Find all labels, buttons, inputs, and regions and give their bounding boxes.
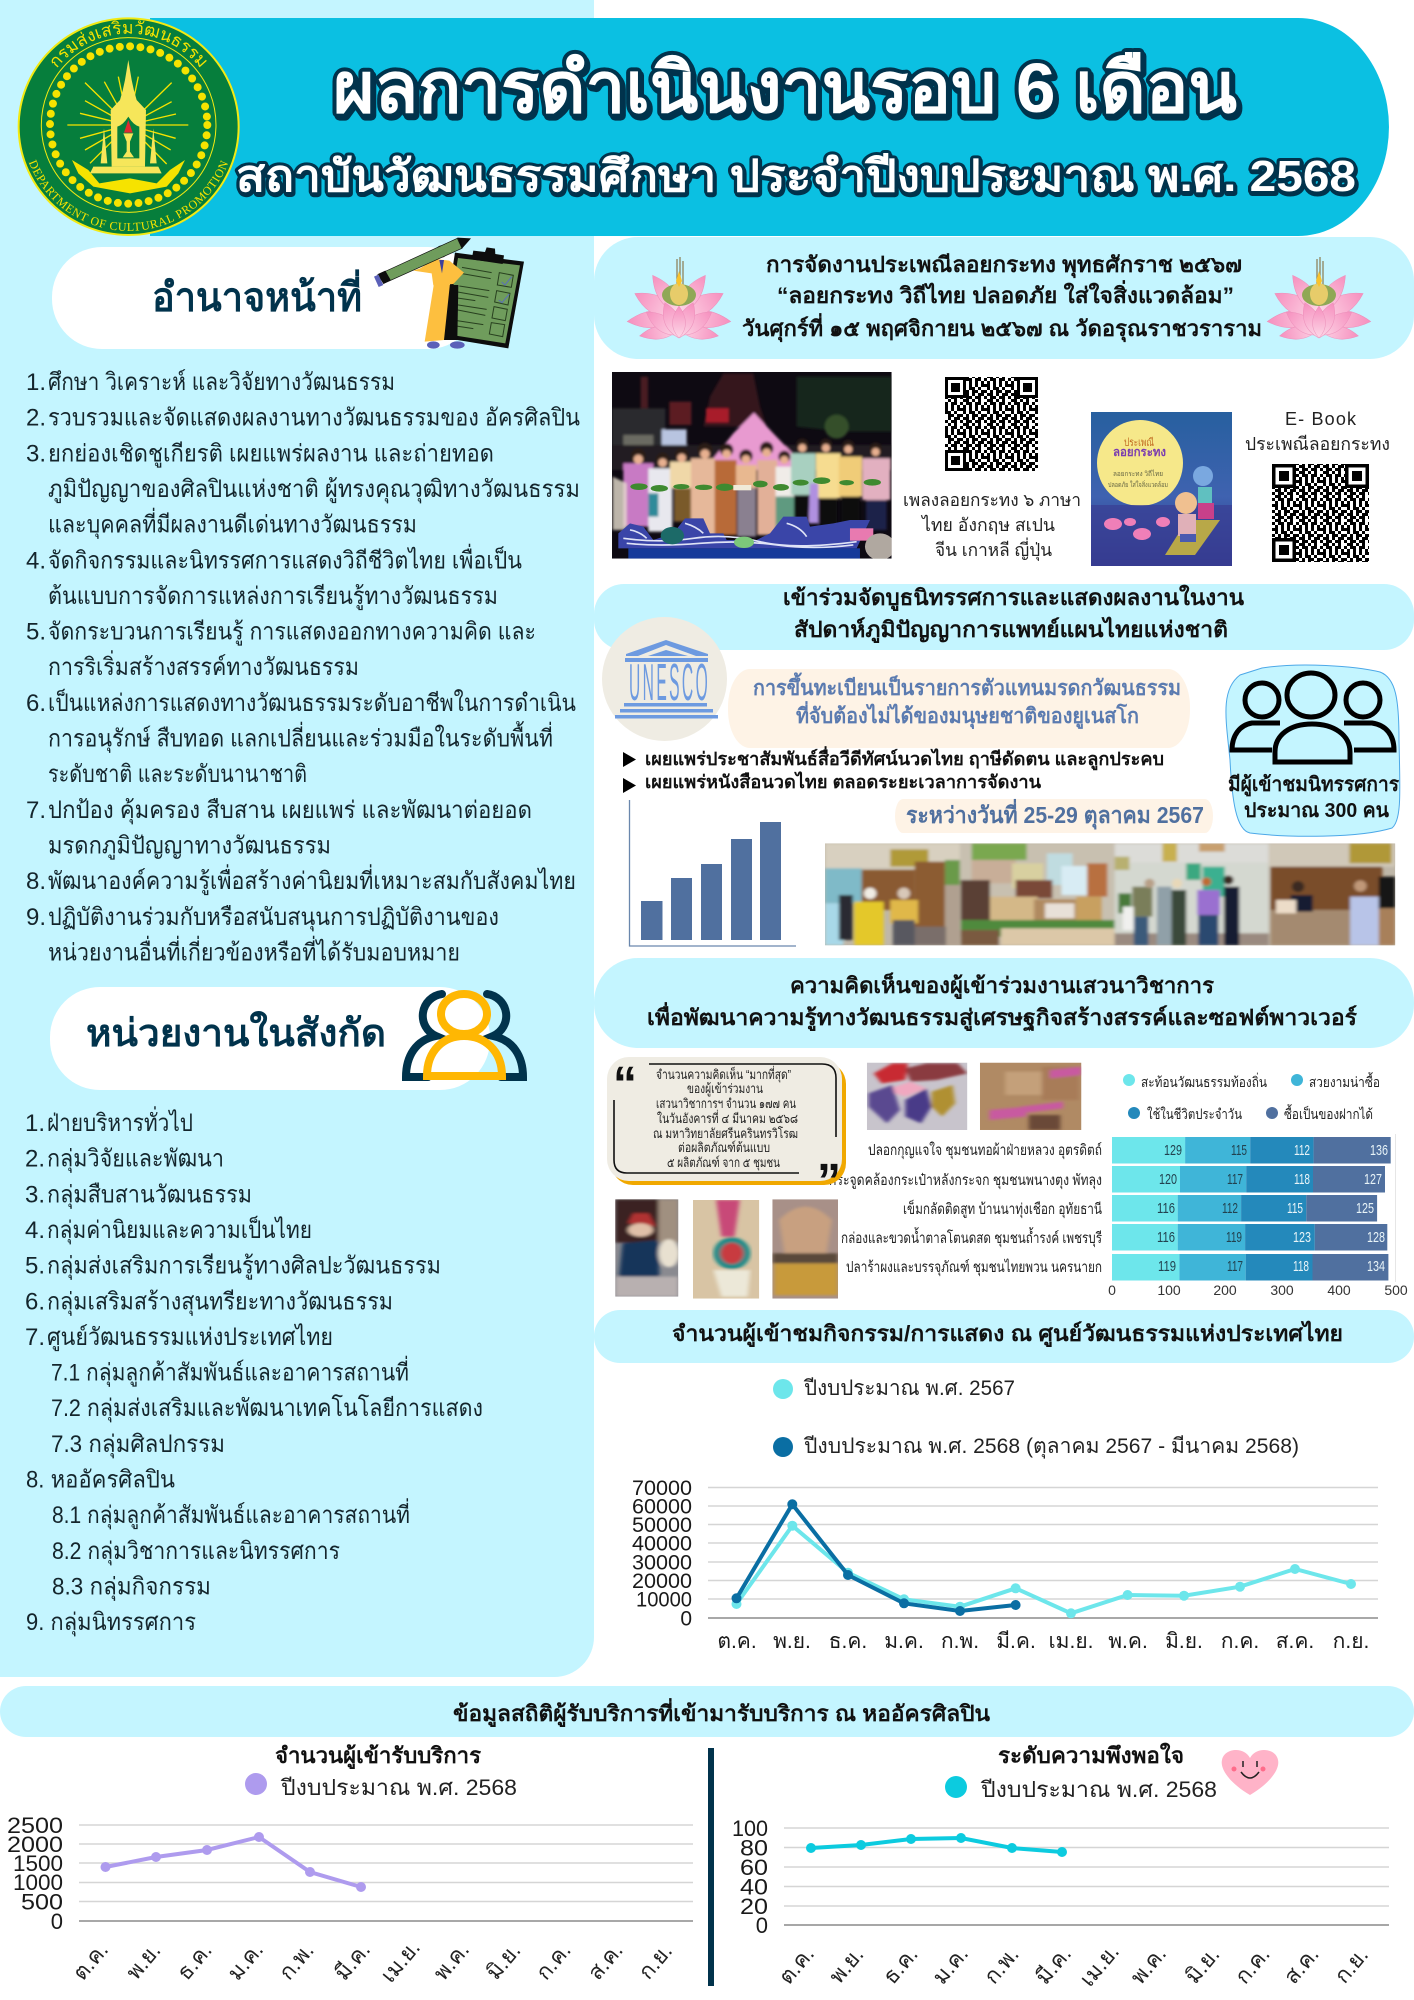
list: duties: การริเริ่มสร้างสรรค์ทางวัฒนธรรม	[48, 650, 359, 681]
stacked bar chart: product ratings: 100	[1157, 1282, 1181, 1298]
stacked bar chart: product ratings: 117	[1227, 1258, 1243, 1275]
bullet list: exhibition activities: เผยแพร่หนังสือนวดไทย ตลอดระยะเวลาการจัดงาน	[645, 771, 1042, 792]
panel: exhibition heading: เข้าร่วมจัดบูธนิทรรศการและแสดงผลงานในงาน	[783, 584, 1244, 612]
stacked bar chart: product ratings: 400	[1327, 1282, 1351, 1298]
line chart: satisfaction: มิ.ย.	[1180, 1942, 1225, 1988]
heading: service users	[245, 1743, 517, 1800]
department logo	[18, 17, 240, 236]
line chart: cultural centre visitors: มิ.ย.	[1165, 1630, 1203, 1653]
line chart: satisfaction: ม.ค.	[927, 1941, 973, 1989]
panel: statistics heading	[0, 1686, 1414, 1737]
list: departments	[25, 1106, 483, 1637]
list: departments: 9. กลุ่มนิทรรศการ	[26, 1609, 196, 1637]
panel: Loy Krathong heading: การจัดงานประเพณีลอยกระทง พุทธศักราช ๒๕๖๗	[766, 252, 1242, 279]
legend: visitors chart	[773, 1377, 1299, 1459]
heading: satisfaction level	[945, 1742, 1217, 1802]
icon: smiling heart	[1222, 1750, 1278, 1795]
date callout	[895, 798, 1213, 833]
list: duties: 4.	[26, 547, 46, 574]
callout: UNESCO registration: ที่จับต้องไม่ได้ของมนุษยชาติของยูเนสโก	[796, 700, 1139, 730]
list: departments: 8.2 กลุ่มวิชาการและนิทรรศการ	[52, 1538, 340, 1566]
e-book label	[1245, 409, 1390, 454]
stacked bar chart: product ratings: 112	[1294, 1142, 1310, 1159]
heading: service users: จำนวนผู้เข้ารับบริการ	[275, 1743, 481, 1770]
line chart: cultural centre visitors: เม.ย.	[1048, 1630, 1094, 1653]
list: departments: 7.2 กลุ่มส่งเสริมและพัฒนาเทคโนโลยีการแสดง	[51, 1394, 483, 1423]
line chart: cultural centre visitors: 70000	[632, 1477, 692, 1500]
line chart: service users: ก.ย.	[633, 1938, 677, 1984]
list: duties: มรดกภูมิปัญญาทางวัฒนธรรม	[48, 832, 331, 860]
line chart: satisfaction: ธ.ค.	[878, 1942, 923, 1989]
list: duties: ปฏิบัติงานร่วมกับหรือสนับสนุนการปฏิบัติงานของ	[48, 904, 499, 932]
e-book cover: ประเพณี	[1124, 436, 1154, 449]
line chart: cultural centre visitors: 0	[680, 1608, 692, 1630]
line chart: cultural centre visitors: พ.ย.	[773, 1630, 811, 1653]
subtitle: สถาบันวัฒนธรรมศึกษา ประจำปีงบประมาณ พ.ศ. 2568	[236, 152, 1356, 201]
caption: song in six languages: จีน เกาหลี ญี่ปุ่น	[935, 537, 1052, 561]
quote card: ๕ ผลิตภัณฑ์ จาก ๕ ชุมชน	[667, 1155, 780, 1171]
heading: satisfaction level: ระดับความพึงพอใจ	[998, 1742, 1184, 1768]
line chart: service users: ม.ค.	[222, 1937, 268, 1985]
legend: stacked bar chart	[1123, 1072, 1380, 1122]
line chart: cultural centre visitors	[632, 1477, 1378, 1653]
line chart: service users: พ.ค.	[428, 1937, 474, 1985]
QR code: e-book	[1272, 464, 1369, 562]
icon: rising bar chart	[630, 800, 796, 946]
line chart: satisfaction: เม.ย.	[1075, 1939, 1124, 1991]
stacked bar chart: product ratings: กระจูดคล้องกระเป๋าหลังกระจก ชุมชนพนางตุง พัทลุง	[829, 1172, 1102, 1190]
line chart: service users: พ.ย.	[121, 1938, 166, 1984]
line chart: satisfaction: 0	[756, 1913, 768, 1938]
stacked bar chart: product ratings: 115	[1231, 1142, 1247, 1159]
line chart: cultural centre visitors: ม.ค.	[884, 1630, 924, 1653]
list: departments: ฝ่ายบริหารทั่วไป	[47, 1106, 193, 1137]
caption: song in six languages: ไทย อังกฤษ สเปน	[920, 514, 1055, 535]
line chart: cultural centre visitors: ก.ย.	[1333, 1630, 1369, 1653]
list: duties: ระดับชาติ และระดับนานาชาติ	[48, 761, 307, 788]
panel: Loy Krathong heading: “ลอยกระทง วิถีไทย ปลอดภัย ใส่ใจสิ่งแวดล้อม”	[777, 279, 1234, 308]
line chart: satisfaction: มี.ค.	[1030, 1941, 1076, 1989]
stacked bar chart: product ratings: ปลอกกุญแจใจ ชุมชนทอผ้าฝ่ายหลวง อุตรดิตถ์	[868, 1141, 1102, 1160]
panel: cultural centre heading	[594, 1310, 1414, 1363]
line chart: satisfaction	[732, 1816, 1389, 1991]
list: departments: 8.1 กลุ่มลูกค้าสัมพันธ์และอาคารสถานที่	[52, 1498, 410, 1530]
stacked bar chart: product ratings: 134	[1367, 1258, 1385, 1275]
list: duties: 6.	[26, 690, 46, 717]
panel: seminar heading	[594, 958, 1414, 1048]
line chart: satisfaction: 20	[740, 1894, 768, 1919]
panel: Loy Krathong heading: วันศุกร์ที่ ๑๕ พฤศจิกายน ๒๕๖๗ ณ วัดอรุณราชวราราม	[742, 312, 1262, 343]
legend: stacked bar chart: สะท้อนวัฒนธรรมท้องถิ่น	[1141, 1073, 1267, 1090]
quote card: ”	[817, 1155, 841, 1208]
photo strip: exhibition booths	[825, 843, 1395, 945]
stacked bar chart: product ratings: 123	[1293, 1229, 1311, 1246]
stacked bar chart: product ratings: 136	[1370, 1142, 1388, 1159]
callout: UNESCO registration	[728, 669, 1190, 748]
icon: UNESCO emblem	[602, 617, 727, 741]
stacked bar chart: product ratings: 116	[1157, 1200, 1175, 1217]
stacked bar chart: product ratings: 120	[1159, 1171, 1177, 1188]
line chart: cultural centre visitors: ส.ค.	[1276, 1630, 1314, 1653]
stacked bar chart: product ratings: 0	[1108, 1282, 1116, 1298]
line chart: cultural centre visitors: 50000	[632, 1514, 692, 1537]
panel: seminar heading: เพื่อพัฒนาความรู้ทางวัฒนธรรมสู่เศรษฐกิจสร้างสรรค์และซอฟต์พาวเวอร์	[647, 1001, 1357, 1032]
list: departments: 8.3 กลุ่มกิจกรรม	[52, 1574, 211, 1602]
list: duties: 5.	[26, 619, 46, 646]
list: duties: รวบรวมและจัดแสดงผลงานทางวัฒนธรรมของ อัครศิลปิน	[48, 405, 580, 432]
heading pill: departments: หน่วยงานในสังกัด	[86, 1011, 386, 1055]
e-book cover: ลอยกระทง วิถีไทย	[1113, 469, 1163, 478]
heading pill: duties	[52, 247, 478, 349]
callout: UNESCO registration: การขึ้นทะเบียนเป็นรายการตัวแทนมรดกวัฒนธรรม	[753, 672, 1181, 700]
list: duties: ศึกษา วิเคราะห์ และวิจัยทางวัฒนธรรม	[48, 368, 395, 396]
icon: UNESCO emblem: UNESCO	[629, 654, 710, 712]
heading: satisfaction level: ปีงบประมาณ พ.ศ. 2568	[980, 1777, 1217, 1802]
stacked bar chart: product ratings	[829, 1134, 1408, 1298]
list: departments: 4.	[25, 1217, 45, 1244]
caption: song in six languages: เพลงลอยกระทง ๖ ภาษา	[903, 490, 1081, 510]
e-book cover	[1091, 412, 1232, 566]
list: duties	[26, 368, 580, 966]
line chart: service users: 1000	[13, 1870, 63, 1895]
stacked bar chart: product ratings: 115	[1287, 1200, 1303, 1217]
line chart: satisfaction: 60	[740, 1855, 768, 1880]
list: duties: ต้นแบบการจัดการแหล่งการเรียนรู้ทางวัฒนธรรม	[48, 583, 498, 611]
line chart: cultural centre visitors: พ.ค.	[1108, 1630, 1148, 1653]
list: duties: 7.	[26, 797, 46, 824]
list: duties: 1.	[26, 369, 46, 396]
line chart: cultural centre visitors: 60000	[632, 1496, 692, 1518]
list: duties: 3.	[26, 440, 46, 467]
QR code: song	[945, 377, 1038, 471]
line chart: satisfaction: พ.ย.	[824, 1942, 869, 1988]
line chart: satisfaction: ก.พ.	[979, 1942, 1024, 1989]
quote card	[607, 1057, 846, 1208]
legend: stacked bar chart: สวยงามน่าซื้อ	[1309, 1072, 1380, 1090]
stacked bar chart: product ratings: 127	[1364, 1171, 1382, 1188]
list: departments: 2.	[25, 1146, 45, 1173]
line chart: cultural centre visitors: 40000	[632, 1532, 692, 1556]
line chart: service users: 0	[51, 1909, 63, 1934]
list: departments: 5.	[25, 1253, 45, 1280]
quote card: ในวันอังคารที่ ๔ มีนาคม ๒๕๖๘	[657, 1110, 798, 1126]
list: departments: กลุ่มวิจัยและพัฒนา	[47, 1146, 224, 1174]
list: duties: จัดกระบวนการเรียนรู้ การแสดงออกทางความคิด และ	[48, 619, 536, 647]
heading pill: duties: อำนาจหน้าที่	[152, 269, 362, 320]
stacked bar chart: product ratings: ปลาร้าผงและบรรจุภัณฑ์ ชุมชนไทยพวน นครนายก	[846, 1258, 1102, 1277]
header banner	[150, 18, 1389, 236]
list: departments: 8. หออัครศิลปิน	[26, 1466, 175, 1494]
legend: stacked bar chart: ใช้ในชีวิตประจำวัน	[1147, 1106, 1242, 1122]
line chart: cultural centre visitors: มี.ค.	[996, 1630, 1036, 1653]
quote card: ของผู้เข้าร่วมงาน	[687, 1081, 763, 1097]
stacked bar chart: product ratings: 125	[1356, 1200, 1374, 1217]
list: departments: 7.	[25, 1324, 45, 1351]
stacked bar chart: product ratings: 128	[1367, 1229, 1385, 1246]
line chart: service users: ธ.ค.	[172, 1938, 217, 1985]
list: duties: พัฒนาองค์ความรู้เพื่อสร้างค่านิยมที่เหมาะสมกับสังคมไทย	[48, 864, 576, 896]
line chart: satisfaction: 100	[732, 1816, 768, 1841]
panel: visitors count	[1226, 665, 1400, 836]
line chart: service users: ส.ค.	[583, 1938, 628, 1985]
line chart: cultural centre visitors: ต.ค.	[717, 1630, 757, 1653]
line chart: cultural centre visitors: 10000	[636, 1588, 692, 1612]
line chart: service users: ต.ค.	[67, 1937, 113, 1985]
list: departments: กลุ่มค่านิยมและความเป็นไทย	[47, 1215, 312, 1245]
panel: seminar heading: ความคิดเห็นของผู้เข้าร่วมงานเสวนาวิชาการ	[790, 971, 1214, 1000]
legend: visitors chart: ปีงบประมาณ พ.ศ. 2568 (ตุลาคม 2567 - มีนาคม 2568)	[803, 1435, 1299, 1459]
list: departments: ศูนย์วัฒนธรรมแห่งประเทศไทย	[47, 1323, 333, 1352]
stacked bar chart: product ratings: 118	[1294, 1171, 1310, 1188]
list: departments: กลุ่มสืบสานวัฒนธรรม	[47, 1181, 252, 1209]
legend: stacked bar chart: ซื้อเป็นของฝากได้	[1284, 1104, 1373, 1122]
panel: visitors count: มีผู้เข้าชมนิทรรศการ	[1228, 773, 1399, 798]
e-book cover: ลอยกระทง	[1113, 445, 1166, 459]
icon: right lotus krathong	[1266, 257, 1372, 342]
line chart: satisfaction: 80	[740, 1836, 768, 1860]
list: duties: ยกย่องเชิดชูเกียรติ เผยแพร่ผลงาน และถ่ายทอด	[48, 440, 494, 468]
line chart: cultural centre visitors: ธ.ค.	[829, 1630, 867, 1653]
stacked bar chart: product ratings: 300	[1270, 1282, 1294, 1298]
line chart: service users: มี.ค.	[329, 1937, 375, 1985]
stacked bar chart: product ratings: 118	[1293, 1258, 1309, 1275]
stacked bar chart: product ratings: 129	[1164, 1142, 1182, 1159]
icon: people group	[1232, 673, 1394, 762]
line chart: satisfaction: ก.ย.	[1329, 1942, 1373, 1988]
stacked bar chart: product ratings: 117	[1227, 1171, 1243, 1188]
stacked bar chart: product ratings: 116	[1157, 1229, 1175, 1246]
quote card: ณ มหาวิทยาลัยศรีนครินทรวิโรฒ	[653, 1126, 798, 1141]
line chart: service users: ก.พ.	[274, 1938, 319, 1985]
panel: Loy Krathong heading	[594, 237, 1414, 359]
list: departments: 3.	[25, 1181, 45, 1208]
stacked bar chart: product ratings: 112	[1222, 1200, 1238, 1217]
list: duties: เป็นแหล่งการแสดงทางวัฒนธรรมระดับอาชีพในการดำเนิน	[48, 688, 576, 717]
photo: Loy Krathong group	[612, 372, 895, 560]
quote card: ต่อผลิตภัณฑ์ต้นแบบ	[678, 1140, 770, 1155]
bullet list: exhibition activities: เผยแพร่ประชาสัมพันธ์สื่อวีดีทัศน์นวดไทย ฤาษีดัดตน และลูกประคบ	[645, 746, 1164, 771]
heading: service users: ปีงบประมาณ พ.ศ. 2568	[280, 1775, 517, 1800]
stacked bar chart: product ratings: เข็มกลัดติดสูท บ้านนาทุ่งเชือก อุทัยธานี	[903, 1199, 1102, 1219]
stacked bar chart: product ratings: กล่องและขวดน้ำตาลโตนดสด ชุมชนถ้ำรงค์ เพชรบุรี	[841, 1227, 1102, 1248]
department logo: กรมส่งเสริมวัฒนธรรม	[52, 20, 207, 68]
list: duties: ปกป้อง คุ้มครอง สืบสาน เผยแพร่ และพัฒนาต่อยอด	[48, 797, 532, 825]
list: departments: 7.1 กลุ่มลูกค้าสัมพันธ์และอาคารสถานที่	[51, 1356, 409, 1388]
e-book cover: ปลอดภัย ใส่ใจสิ่งแวดล้อม	[1108, 480, 1168, 489]
line chart: service users: 1500	[13, 1851, 63, 1876]
panel: exhibition heading	[594, 584, 1414, 650]
left column background panel	[0, 0, 594, 1677]
stacked bar chart: product ratings: 119	[1226, 1229, 1242, 1246]
icon: person with giant pencil and clipboard	[374, 238, 524, 349]
line chart: service users: ก.ค.	[531, 1938, 576, 1985]
caption: song in six languages	[903, 490, 1081, 561]
icon: three people	[406, 994, 523, 1077]
e-book label: ประเพณีลอยกระทง	[1245, 434, 1390, 454]
vertical divider	[708, 1748, 714, 1986]
stacked bar chart: product ratings: 500	[1384, 1282, 1408, 1298]
line chart: satisfaction: ส.ค.	[1279, 1942, 1324, 1989]
list: duties: การอนุรักษ์ สืบทอด แลกเปลี่ยนและร่วมมือในระดับพื้นที่	[48, 720, 553, 754]
photos: community products	[615, 1063, 1081, 1299]
line chart: service users: 2500	[7, 1813, 63, 1838]
list: departments: กลุ่มส่งเสริมการเรียนรู้ทางศิลปะวัฒนธรรม	[47, 1253, 441, 1281]
panel: statistics heading: ข้อมูลสถิติผู้รับบริการที่เข้ามารับบริการ ณ หออัครศิลปิน	[453, 1697, 990, 1728]
panel: visitors count: ประมาณ 300 คน	[1244, 800, 1389, 822]
list: duties: จัดกิจกรรมและนิทรรศการแสดงวิถีชีวิตไทย เพื่อเป็น	[48, 543, 522, 574]
quote card: จำนวนความคิดเห็น “มากที่สุด”	[656, 1065, 791, 1083]
legend: visitors chart: ปีงบประมาณ พ.ศ. 2567	[803, 1377, 1015, 1400]
quote card: “	[613, 1058, 637, 1111]
line chart: service users: เม.ย.	[376, 1935, 425, 1987]
e-book label: E- Book	[1285, 409, 1357, 429]
panel: exhibition heading: สัปดาห์ภูมิปัญญาการแพทย์แผนไทยแห่งชาติ	[794, 616, 1228, 644]
list: departments: 1.	[25, 1110, 45, 1137]
line chart: service users: 500	[21, 1890, 63, 1914]
list: departments: กลุ่มเสริมสร้างสุนทรียะทางวัฒนธรรม	[47, 1288, 393, 1316]
list: duties: 9.	[26, 904, 46, 931]
list: departments: 7.3 กลุ่มศิลปกรรม	[51, 1431, 225, 1459]
line chart: cultural centre visitors: ก.ค.	[1221, 1630, 1259, 1653]
date callout: ระหว่างวันที่ 25-29 ตุลาคม 2567	[906, 798, 1204, 830]
line chart: cultural centre visitors: ก.พ.	[941, 1630, 979, 1653]
line chart: satisfaction: ต.ค.	[773, 1941, 819, 1989]
line chart: service users: 2000	[7, 1832, 63, 1857]
quote card: เสวนาวิชาการฯ จำนวน ๑๗๗ คน	[656, 1096, 796, 1111]
list: duties: 2.	[26, 405, 46, 432]
list: duties: หน่วยงานอื่นที่เกี่ยวข้องหรือที่ได้รับมอบหมาย	[48, 935, 460, 966]
line chart: service users	[7, 1813, 693, 1987]
list: duties: ภูมิปัญญาของศิลปินแห่งชาติ ผู้ทรงคุณวุฒิทางวัฒนธรรม	[48, 476, 580, 504]
line chart: cultural centre visitors: 30000	[632, 1552, 692, 1574]
list: duties: และบุคคลที่มีผลงานดีเด่นทางวัฒนธรรม	[48, 508, 417, 540]
panel: cultural centre heading: จำนวนผู้เข้าชมกิจกรรม/การแสดง ณ ศูนย์วัฒนธรรมแห่งประเทศไทย	[672, 1320, 1343, 1348]
line chart: cultural centre visitors: 20000	[632, 1570, 692, 1593]
main title: ผลการดำเนินงานรอบ 6 เดือน	[333, 49, 1237, 127]
line chart: satisfaction: ก.ค.	[1230, 1942, 1275, 1989]
line chart: satisfaction: 40	[740, 1874, 768, 1900]
department logo: DEPARTMENT OF CULTURAL PROMOTION	[28, 159, 228, 231]
list: departments: 6.	[25, 1288, 45, 1315]
icon: left lotus krathong	[626, 257, 732, 342]
bullet list: exhibition activities	[623, 746, 1164, 793]
line chart: satisfaction: พ.ค.	[1125, 1941, 1171, 1989]
line chart: service users: มิ.ย.	[481, 1938, 526, 1984]
stacked bar chart: product ratings: 200	[1213, 1282, 1237, 1298]
heading pill: departments	[50, 987, 490, 1090]
list: duties: 8.	[26, 868, 46, 895]
stacked bar chart: product ratings: 119	[1158, 1258, 1176, 1275]
